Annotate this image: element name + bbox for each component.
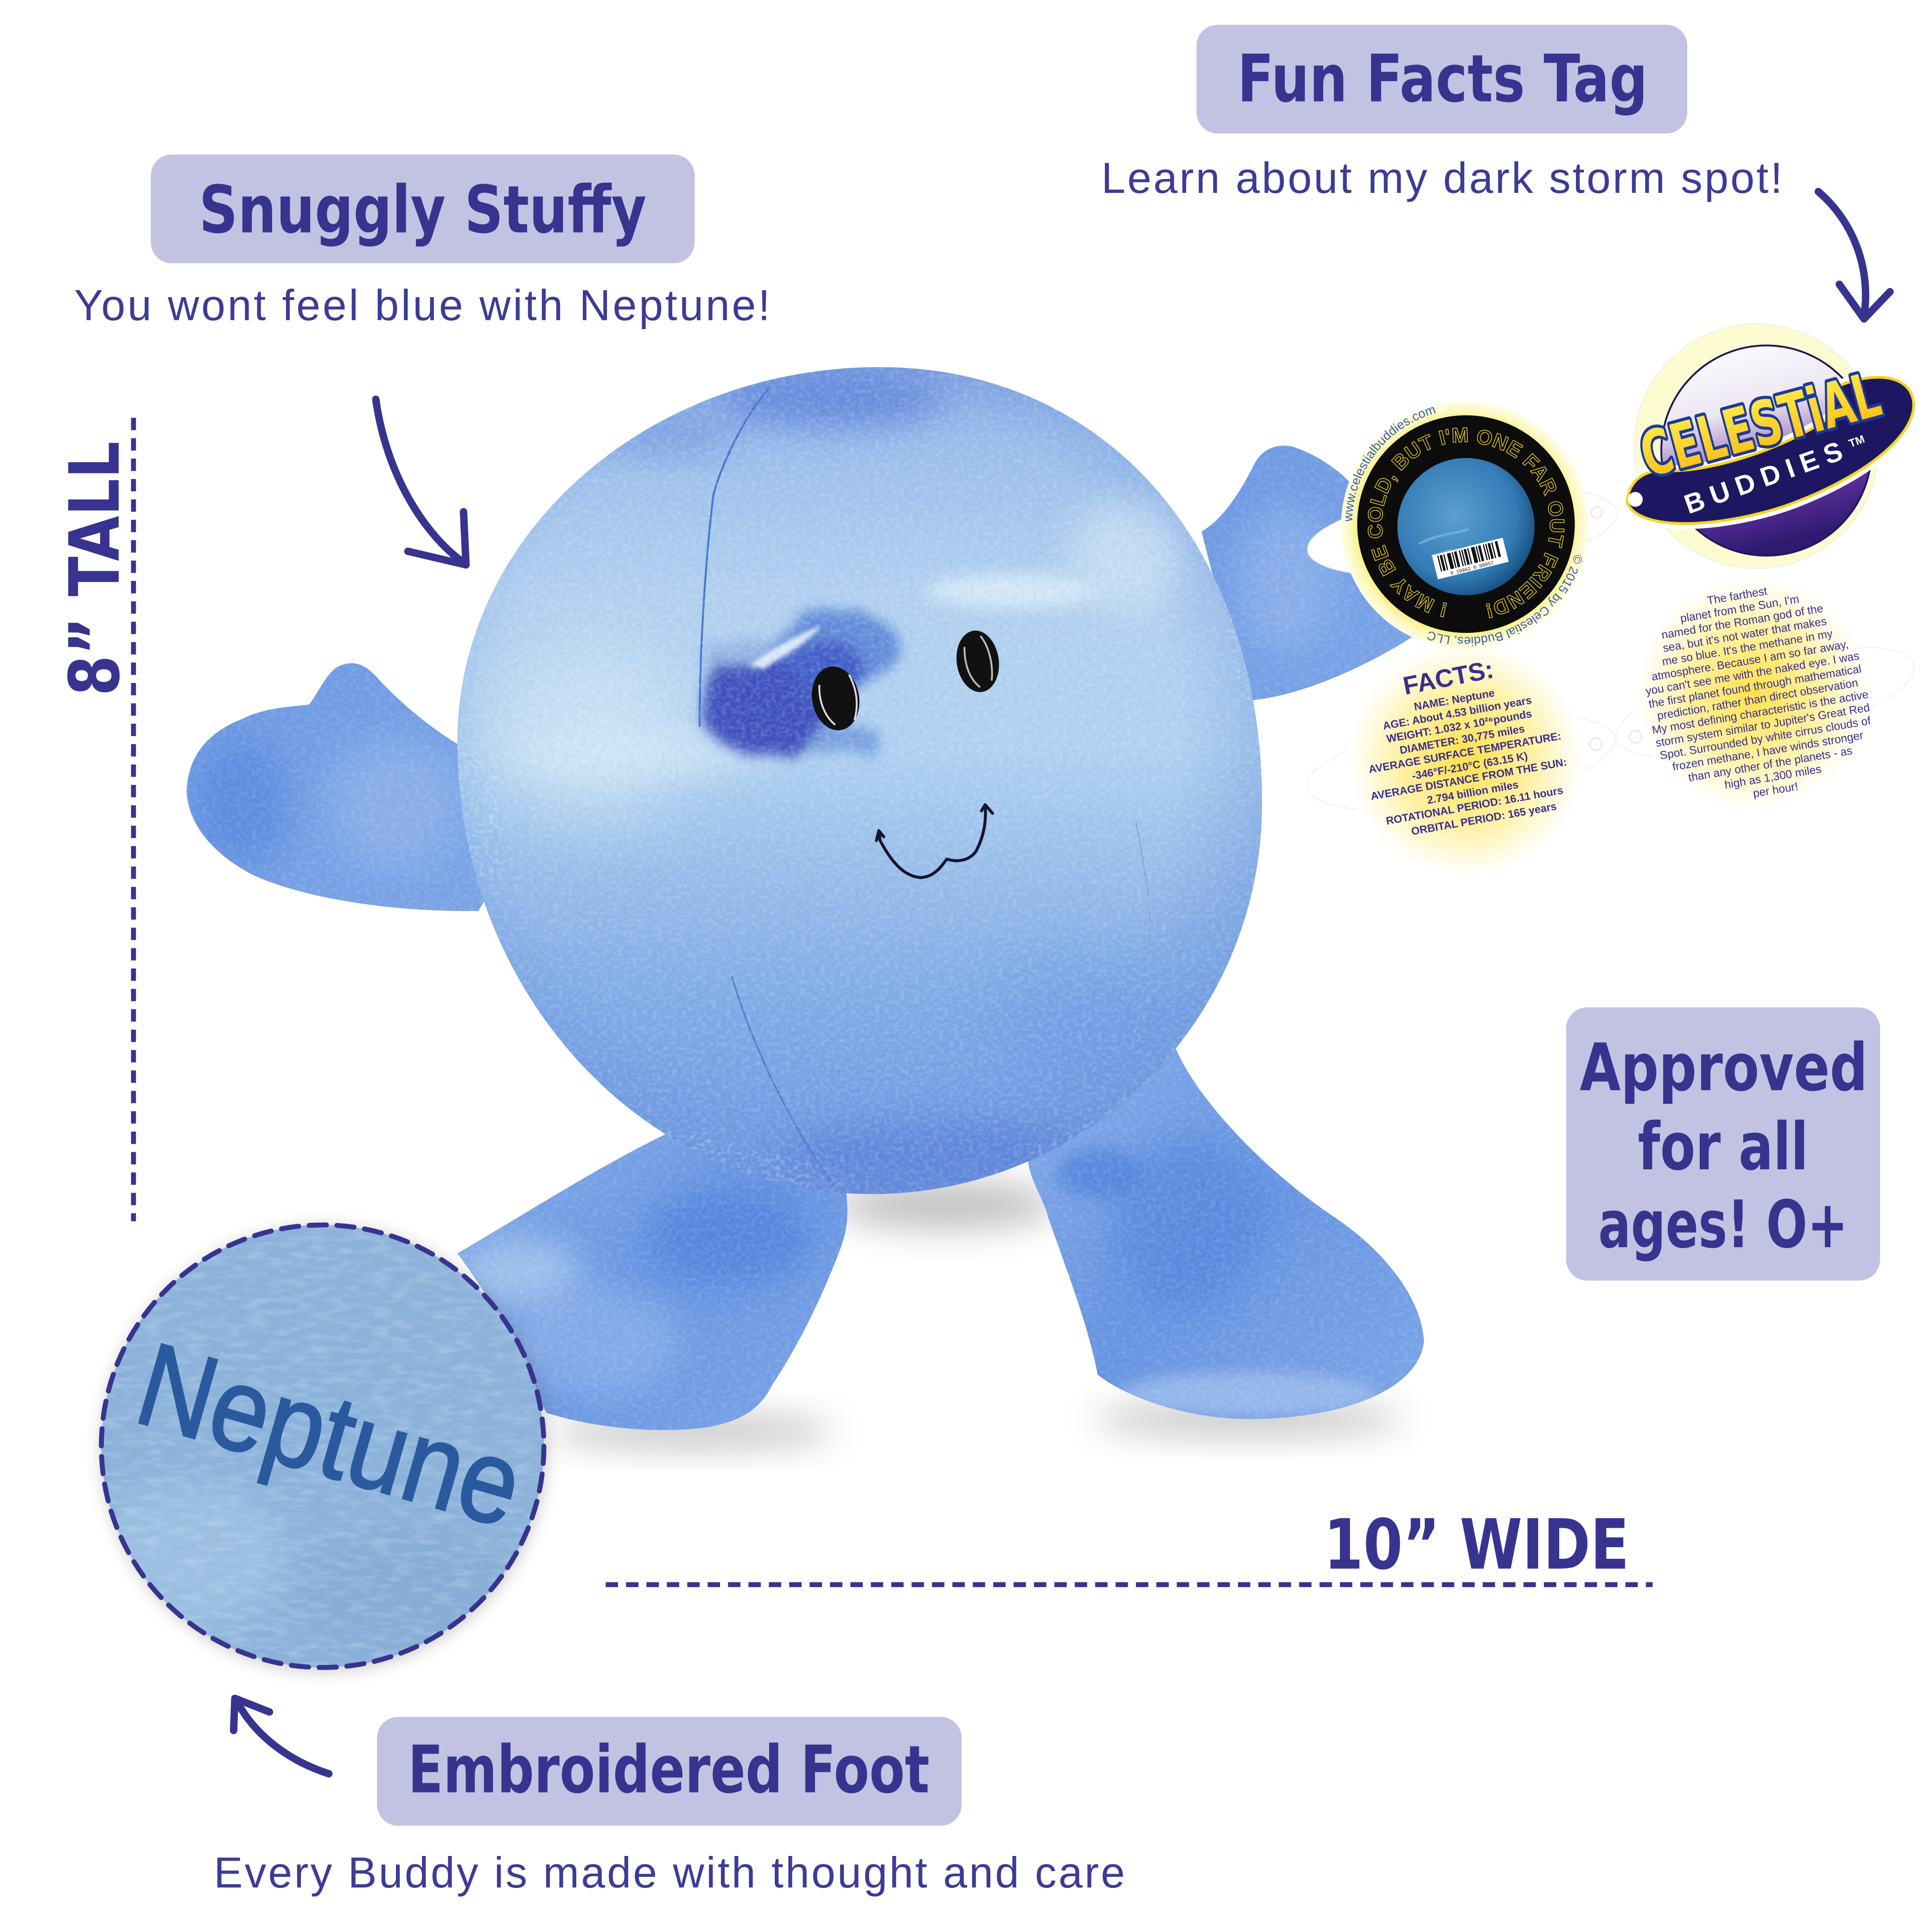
logo planet [1661,345,1871,555]
facts list: DIAMETER: 30,775 miles [1399,722,1525,756]
facts list: ORBITAL PERIOD: 165 years [1410,800,1557,837]
yellow glow disc [1635,576,1870,811]
story text: The farthest [1706,585,1768,607]
callout: Approved for all ages [1566,1007,1880,1281]
heading: Fun Facts Tag [1237,41,1648,117]
smile [876,805,993,878]
Celestial Buddies logo tag [1614,324,1932,568]
facts list: AVERAGE SURFACE TEMPERATURE: [1368,730,1562,776]
arrow: to close-up [234,1698,329,1774]
barcode: 0 10962 0 00057 [1450,561,1494,577]
tag disc [1341,402,1588,649]
story text: planet from the Sun, I'm [1679,593,1800,625]
arrow: to tag [1818,191,1890,319]
fur texture [173,358,1434,1446]
trademark: TM [1847,433,1867,450]
width label: 10” WIDE [1324,1505,1629,1585]
logo ring [1614,363,1932,556]
story text [1645,585,1872,800]
height dashed line [133,418,134,1221]
seams [700,388,769,727]
callout: Snuggly Stuffy [74,154,770,330]
tag ears [1606,624,1924,780]
tag ears [1301,697,1621,829]
story text: Spot. Surrounded by white cirrus clouds of [1659,714,1872,762]
badge [151,154,695,263]
barcode [1432,538,1509,580]
story text: sea, but it's not water that makes [1662,615,1828,655]
right foot [1027,1045,1424,1419]
story text: prediction, rather than direct observation [1656,676,1859,722]
logo buddies: BUDDIES [1680,436,1847,520]
website text: www.celestialbuddies.com [1340,402,1437,523]
story text: than any other of the planets - as [1687,745,1853,784]
story text: you can't see me with the naked eye. I was [1645,650,1860,698]
embroidered foot close-up [87,1224,548,1672]
facts list: NAME: Neptune [1413,687,1496,713]
planet body [445,358,1273,1205]
Neptune plush toy [173,358,1434,1446]
copyright text: © 2015 by Celestial Buddies, LLC [1425,553,1586,648]
fabric circle [102,1225,544,1667]
facts list: AVERAGE DISTANCE FROM THE SUN: [1370,756,1568,802]
badge [1197,25,1687,134]
facts list: -346°F/-210°C (63.15 K) [1411,750,1529,782]
story text: My most defining characteristic is the active [1651,688,1869,737]
tag ears [1303,472,1622,591]
story text: atmosphere. Because I am so far away, [1651,638,1849,683]
arrow: to plush [376,399,466,565]
right arm [1201,446,1422,701]
story text: frozen methane, I have winds stronger [1671,729,1864,773]
ring slogan: ! MAY BE COLD, BUT I'M ONE FAR OUT FRIEND! [1364,424,1568,622]
dashed outline [102,1225,544,1667]
front of fun facts tag [1303,402,1622,649]
facts heading: FACTS: [1401,655,1496,700]
text: for all [1638,1109,1808,1185]
heading: Snuggly Stuffy [199,172,646,248]
caption: Learn about my dark storm spot! [1101,154,1782,202]
badge [377,1717,962,1826]
logo glow disc [1634,324,1879,568]
width dashed line [606,1584,1652,1586]
badge [1566,1007,1880,1281]
left eye [807,663,864,734]
planet photo [1397,458,1535,595]
left foot [457,1131,848,1430]
story text: named for the Roman god of the [1661,602,1824,642]
text [1580,1030,1868,1263]
dark storm spot [700,609,900,757]
text: Approved [1580,1030,1868,1106]
story text: storm system similar to Jupiter's Great Red [1655,701,1871,750]
logo white dot [1628,492,1643,507]
story text: high as 1,300 miles [1724,763,1822,791]
plush shadow [550,1180,1403,1449]
height label: 8” TALL [55,441,135,696]
facts list: WEIGHT: 1.032 x 10²⁶pounds [1385,708,1533,745]
facts list: AGE: About 4.53 billion years [1382,694,1533,732]
embroidered Neptune: Neptune [124,1317,536,1552]
caption: Every Buddy is made with thought and care [214,1849,1125,1897]
black ring [1357,415,1575,633]
facts list [1368,687,1568,837]
caption: You wont feel blue with Neptune! [74,281,770,330]
facts tag [1301,640,1621,878]
facts list: 2.794 billion miles [1426,778,1519,806]
text: ages! O+ [1598,1187,1848,1263]
facts list: ROTATIONAL PERIOD: 16.11 hours [1385,784,1564,827]
limb colour variation [194,507,1378,1416]
callout: Embroidered Foot [214,1717,1125,1897]
yellow glow disc [1347,640,1585,878]
heading: Embroidered Foot [408,1732,930,1808]
story tag [1606,576,1924,811]
callout: Fun Facts Tag [1101,25,1782,202]
left arm [187,663,507,911]
story text: per hour! [1752,780,1799,800]
right eye [953,628,1003,695]
story text: the first planet found through mathematical [1648,663,1862,711]
story text: me so blue. It's the methane in my [1661,627,1834,668]
